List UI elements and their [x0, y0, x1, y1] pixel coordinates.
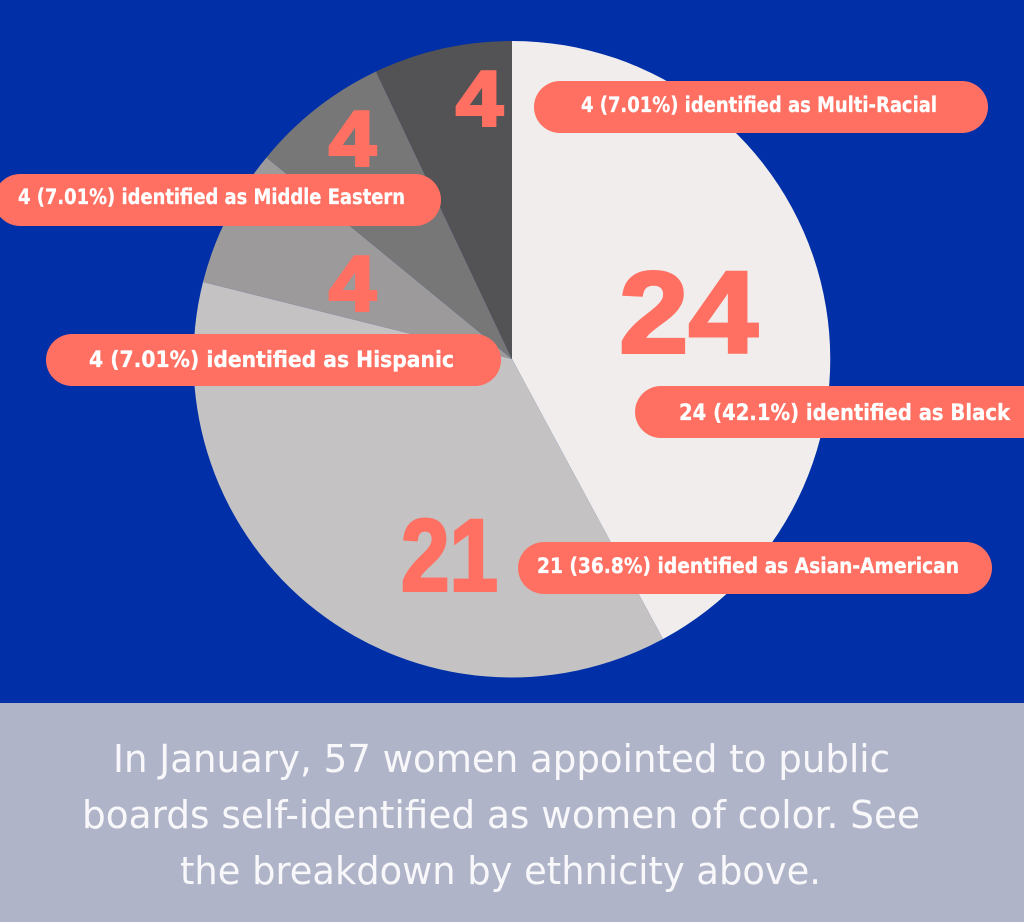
label: Hispanic	[46, 334, 501, 386]
blue background panel	[0, 0, 1024, 703]
pie chart: ethnicity breakdown	[193, 41, 830, 677]
label: Middle Eastern: 4 (7.01%) identified as Middle Eastern	[18, 185, 405, 209]
caption text	[82, 737, 920, 893]
slice: Hispanic 7.01%	[203, 158, 512, 359]
number: Black count: 24	[619, 248, 758, 378]
caption text: boards self-identified as women of color. See	[82, 793, 920, 837]
number: Middle Eastern count: 4	[329, 94, 376, 182]
slice: Asian-American 36.8%	[193, 282, 663, 677]
label: Middle Eastern	[0, 174, 441, 226]
label: Multi-Racial	[534, 81, 988, 133]
slice: Multi-Racial 7.01%	[376, 41, 512, 359]
label: Multi-Racial: 4 (7.01%) identified as Multi-Racial	[581, 93, 937, 117]
label: Hispanic: 4 (7.01%) identified as Hispanic	[89, 348, 454, 373]
caption text: In January, 57 women appointed to public	[113, 737, 890, 781]
number: Multi-Racial count: 4	[456, 54, 503, 142]
label: Black	[635, 386, 1024, 438]
label: Asian-American: 21 (36.8%) identified as Asian-American	[537, 554, 959, 578]
slice: Black 42.1%	[512, 41, 830, 639]
caption panel	[0, 703, 1024, 922]
number: Asian-American count: 21	[401, 498, 498, 612]
slice: Middle Eastern 7.01%	[266, 72, 512, 359]
number: Hispanic count: 4	[329, 240, 376, 328]
label: Asian-American	[518, 542, 992, 594]
caption text: the breakdown by ethnicity above.	[180, 849, 821, 893]
